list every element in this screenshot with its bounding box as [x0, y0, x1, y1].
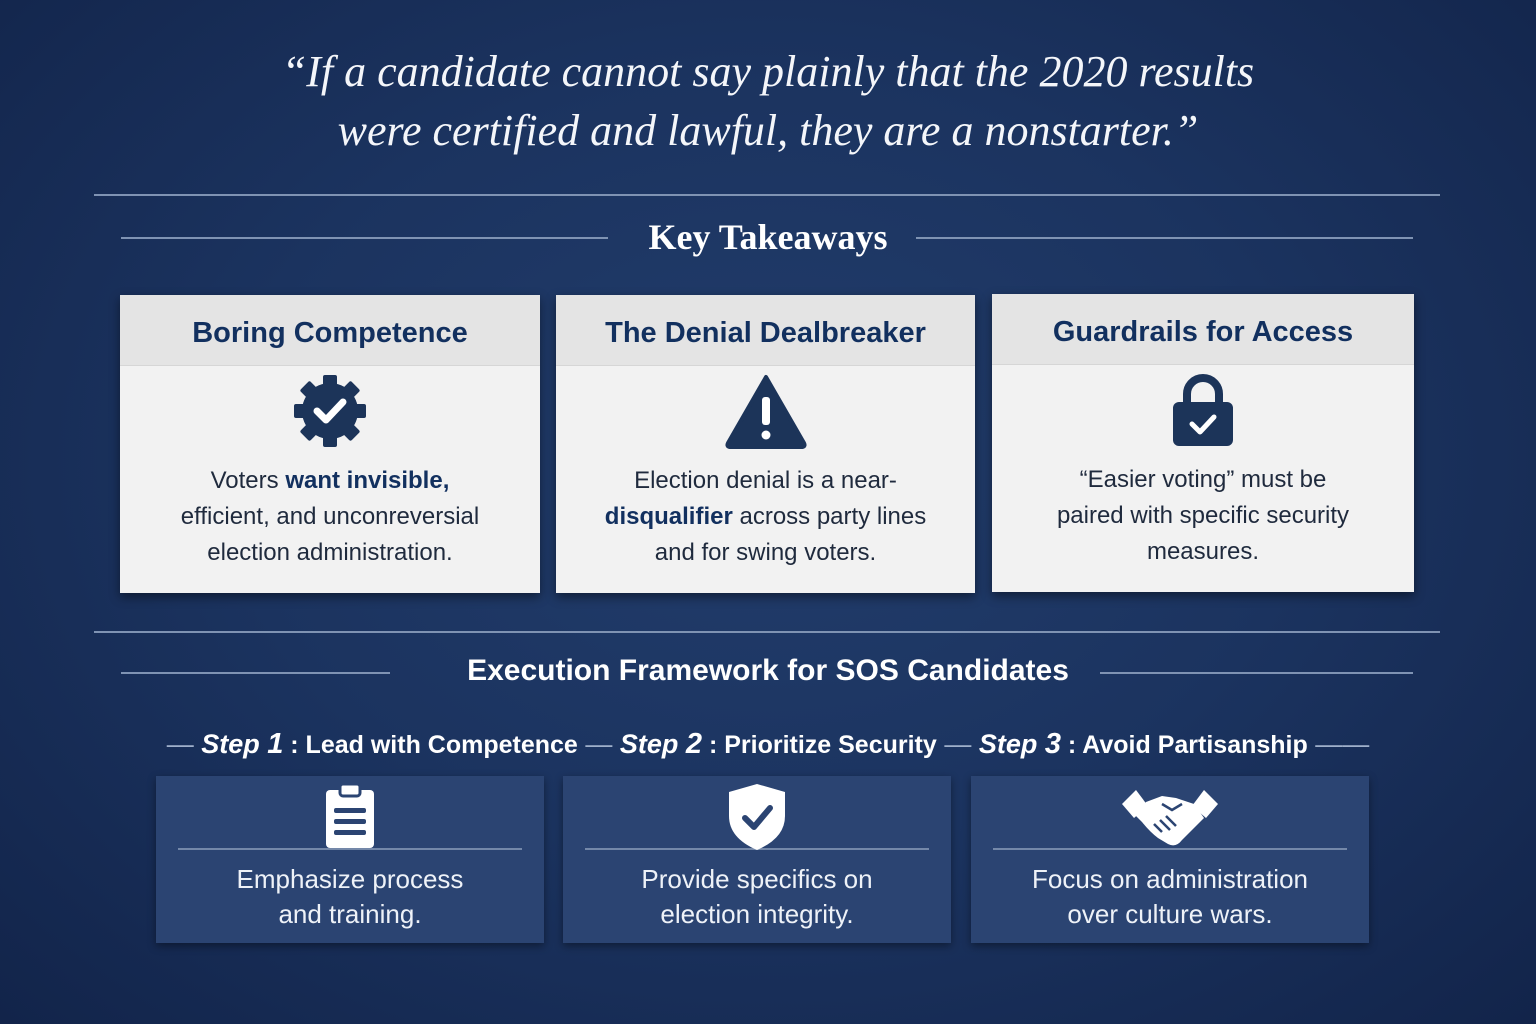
icon: shield check: [729, 784, 785, 850]
icon: gear check: [294, 375, 366, 447]
step 2 box: [563, 776, 951, 943]
panel: denial dealbreaker: disqualifier across party lines: [605, 503, 926, 530]
panel: denial dealbreaker: The Denial Dealbreaker: [605, 317, 926, 349]
panel: guardrails for access: measures.: [1147, 538, 1259, 565]
quote: [282, 47, 1254, 155]
step 1 box: [156, 776, 544, 943]
heading: execution framework: Execution Framework for SOS Candidates: [467, 654, 1069, 687]
quote: “If a candidate cannot say plainly that the 2020 results: [282, 47, 1254, 96]
icon: handshake: [1122, 790, 1218, 846]
panel: boring competence: Boring Competence: [192, 317, 468, 349]
panel: guardrails for access: paired with specific security: [1057, 502, 1349, 529]
icon: warning: [725, 374, 807, 449]
step 2 box: election integrity.: [660, 899, 854, 929]
step 2 box: Provide specifics on: [641, 864, 873, 894]
panel: denial dealbreaker: [556, 295, 975, 593]
step 3 box: Focus on administration: [1032, 864, 1308, 894]
panel: guardrails for access: Guardrails for Access: [1053, 316, 1353, 348]
panel: guardrails for access: “Easier voting” must be: [1080, 466, 1326, 493]
icon: lock: [1173, 374, 1233, 446]
panel: boring competence: efficient, and unconreversial: [181, 503, 479, 530]
step 1 box: and training.: [278, 899, 422, 929]
panel: boring competence: election administration.: [207, 539, 453, 566]
panel: denial dealbreaker: and for swing voters.: [655, 539, 876, 566]
quote: were certified and lawful, they are a nonstarter.”: [338, 106, 1198, 155]
panel: guardrails for access: [992, 294, 1414, 592]
panel: denial dealbreaker: Election denial is a near-: [634, 467, 897, 494]
step labels: — Step 1 : Lead with Competence — Step 2 : Prioritize Security — Step 3 : Avoid Partisanship ——: [167, 728, 1369, 760]
step 1 box: Emphasize process: [237, 864, 463, 894]
panel: boring competence: Voters want invisible,: [211, 467, 449, 494]
step 3 box: [971, 776, 1369, 943]
heading: key takeaways: Key Takeaways: [648, 217, 888, 257]
step 3 box: over culture wars.: [1067, 899, 1273, 929]
icon: clipboard: [326, 786, 374, 848]
panel: boring competence: [120, 295, 540, 593]
